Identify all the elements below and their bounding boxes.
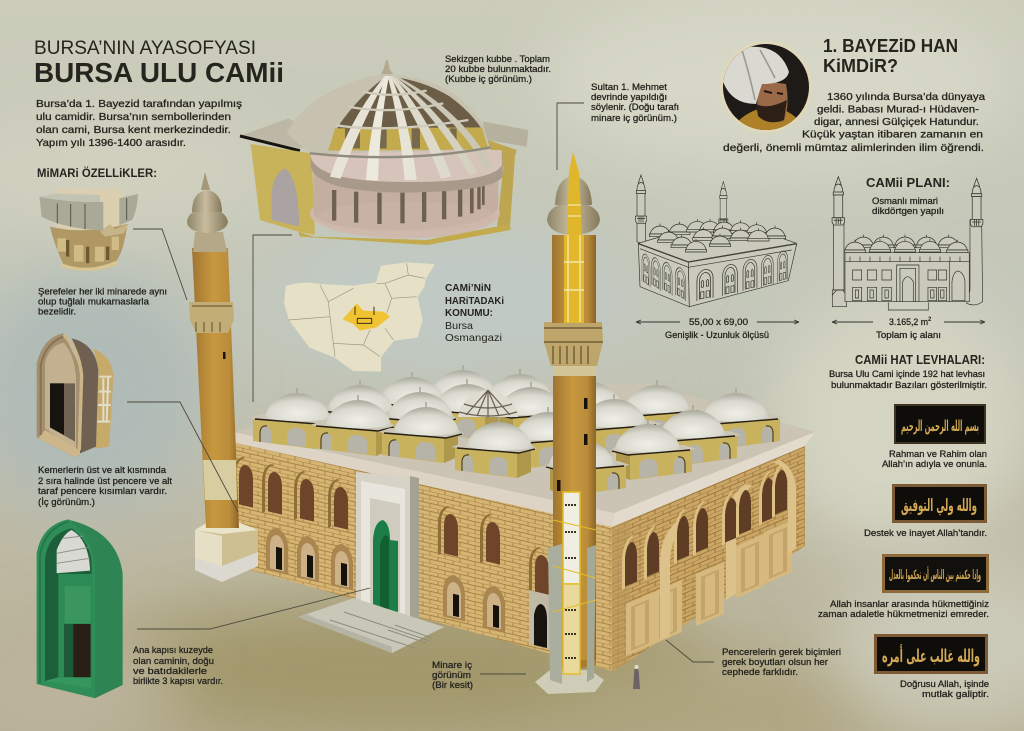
text: plan note: Osmanlı mimari (872, 196, 938, 206)
text: biography: digar, annesi Gülçiçek Hatundur. (814, 117, 979, 128)
text: caption 4: Doğrusu Allah, işinde (900, 679, 989, 689)
windows (584, 398, 588, 409)
calligraphy panel 2 (892, 484, 987, 523)
text: door note (133, 645, 223, 686)
icon: person (633, 665, 640, 689)
leader: minaret section (480, 673, 526, 675)
text: arches note (38, 465, 173, 507)
text: door note: Ana kapısı kuzeyde (133, 645, 213, 655)
text: caption 1: Rahman ve Rahim olan (889, 449, 987, 459)
dimension: width and length: 55,00 x 69,00 (689, 317, 748, 327)
front windows upper (233, 455, 549, 601)
text: balcony note (38, 286, 167, 316)
calligraphy panel 1 (894, 404, 986, 444)
portrait of Bayezid (720, 41, 812, 134)
side wall (612, 445, 805, 672)
text: windows note: Pencerelerin gerek biçimleri (722, 647, 841, 657)
leader: balcony (133, 229, 187, 300)
text: arches note: Kemerlerin üst ve alt kısmında (38, 465, 166, 475)
text: dome note: (Kubbe iç görünüm.) (445, 74, 532, 84)
leader: dome (253, 235, 292, 402)
interior section (563, 492, 580, 584)
line drawing: elevation (832, 177, 983, 310)
text: door note: olan caminin, doğu (133, 656, 214, 666)
shaft (553, 365, 596, 665)
balcony (553, 365, 596, 376)
intro text: ulu camidir. Bursa’nın sembollerinden (36, 111, 231, 123)
text: caption 4 (900, 679, 989, 699)
text: arches note: 2 sıra halinde üst pencere ve alt (38, 476, 173, 486)
text: Sultan note: Sultan 1. Mehmet (591, 82, 668, 92)
text: windows note: gerek boyutları olsun her (722, 657, 828, 667)
upper shaft (552, 235, 596, 323)
roof edges (233, 432, 614, 527)
main portal (356, 472, 419, 621)
text: balcony note: olup tuğlalı mukarnaslarla (38, 296, 149, 306)
text: door note: birlikte 3 kapısı vardır. (133, 676, 223, 686)
text: dome note: Sekizgen kubbe . Toplam (445, 54, 550, 64)
base (535, 670, 604, 694)
text: minaret section note (432, 660, 473, 690)
text: location on the map: CAMi’NiN (445, 282, 491, 294)
heading: calligraphy panels: CAMii HAT LEVHALARI: (855, 353, 985, 367)
text: calligraphy intro: Bursa Ulu Cami içinde 192 hat levhası (829, 369, 985, 379)
side windows (622, 461, 787, 590)
calligraphy panel 4 (874, 634, 988, 674)
text: caption 4: mutlak galiptir. (922, 689, 989, 699)
text: arches note: taraf pencere kısımları vardır. (38, 486, 167, 496)
text: dome note (445, 54, 551, 84)
left minaret (187, 172, 258, 582)
heading: who is Bayezid: KiMDiR? (823, 56, 898, 76)
mosque building (233, 365, 815, 672)
dimension: total interior area: 3.165,2 m (889, 317, 928, 327)
side door (529, 590, 554, 650)
text: minaret section note: Minare iç (432, 660, 473, 670)
text: biography: Küçük yaştan itibaren zamanın en (802, 130, 983, 140)
text: caption 3 (818, 599, 990, 619)
text: biography: geldi. Babası Murad-ı Hüdaven- (817, 104, 979, 116)
dimension: width and length: Genişlik - Uzunluk ölçüsü (665, 330, 769, 340)
glass dome (458, 390, 518, 417)
leader: minaret note (557, 103, 584, 170)
text: caption 1 (882, 449, 987, 469)
text: balcony note: Şerefeler her iki minarede aynı (38, 286, 167, 296)
leader: main door (137, 588, 370, 629)
title (34, 37, 284, 88)
leader: arches (127, 402, 238, 512)
text: plan note (872, 196, 944, 216)
side wall pilasters (626, 460, 796, 656)
dimension: total interior area (832, 317, 985, 340)
heading: who is Bayezid (823, 36, 958, 76)
text: Sultan note: minare iç görünüm.) (591, 113, 677, 123)
title: BURSA ULU CAMii (34, 57, 284, 88)
line drawing: perspective view (635, 175, 797, 307)
calligraphy panel 3 (882, 554, 989, 593)
text: balcony note: bezelidir. (38, 306, 76, 316)
front wall (236, 442, 612, 671)
leader: window note (666, 640, 714, 662)
text: plan note: dikdörtgen yapılı (872, 206, 944, 216)
icon: green door detail (37, 519, 123, 698)
text: caption 3: zaman adaletle hükmetmenizi emreder. (818, 609, 989, 619)
dimension: width and length (636, 317, 799, 340)
roof slab (233, 384, 815, 513)
domes (249, 365, 784, 496)
text: windows note: cephede farklıdır. (722, 667, 798, 677)
text: door note: ve batıdakilerle (133, 666, 207, 676)
intro text (36, 98, 242, 149)
dimension: total interior area: 2 (928, 317, 932, 323)
text: caption 2: Destek ve inayet Allah’tandır. (864, 528, 987, 538)
map of Bursa (285, 263, 433, 371)
heading: architectural features: MiMARi ÖZELLiKLER: (37, 165, 157, 180)
text: location on the map: Osmangazi (445, 332, 502, 344)
icon: octagonal dome cutaway (240, 60, 528, 245)
icon: balcony detail (39, 188, 138, 271)
text: location on the map: Bursa (445, 320, 473, 332)
text: windows note (722, 647, 841, 677)
text: Sultan note: devrinde yapıldığı (591, 92, 667, 102)
front windows lower (266, 525, 505, 633)
heading: who is Bayezid: 1. BAYEZiD HAN (823, 36, 958, 56)
text: biography: değerli, önemli mümtaz alimlerinden ilim öğrendi. (723, 143, 984, 154)
icon: arched window detail (37, 333, 113, 457)
stone layer (548, 544, 562, 684)
text: caption 3: Allah insanlar arasında hükmettiğiniz (830, 599, 990, 609)
cap (547, 202, 600, 235)
text: calligraphy intro (829, 369, 987, 390)
heading: plan: CAMii PLANI: (866, 175, 950, 190)
text: biography (723, 92, 985, 154)
right minaret with section (535, 152, 604, 694)
intro text: Bursa’da 1. Bayezid tarafından yapılmış (36, 98, 242, 110)
intro text: Yapım yılı 1396-1400 arasıdır. (36, 137, 186, 149)
text: minaret section note: (Bir kesit) (432, 680, 473, 690)
text: Sultan note: söylenir. (Doğu tarafı (591, 102, 679, 112)
entrance steps (298, 598, 444, 653)
text: minaret section note: görünüm (432, 670, 471, 680)
text: location on the map (445, 282, 504, 344)
text: biography: 1360 yılında Bursa’da dünyaya (827, 92, 985, 103)
text: dome note: 20 kubbe bulunmaktadır. (445, 64, 551, 74)
text: Sultan note (591, 82, 679, 123)
text: caption 1: Allah’ın adıyla ve onunla. (882, 459, 987, 469)
intro text: olan cami, Bursa kent merkezindedir. (36, 124, 231, 136)
dimension: total interior area: Toplam iç alanı (876, 330, 941, 340)
text: location on the map: KONUMU: (445, 307, 493, 319)
text: arches note: (İç görünüm.) (38, 497, 95, 507)
text: location on the map: HARiTADAKi (445, 295, 504, 307)
text: calligraphy intro: bulunmaktadır Bazıları gösterilmiştir. (831, 380, 987, 390)
title: BURSA’NIN AYASOFYASI (34, 37, 256, 59)
